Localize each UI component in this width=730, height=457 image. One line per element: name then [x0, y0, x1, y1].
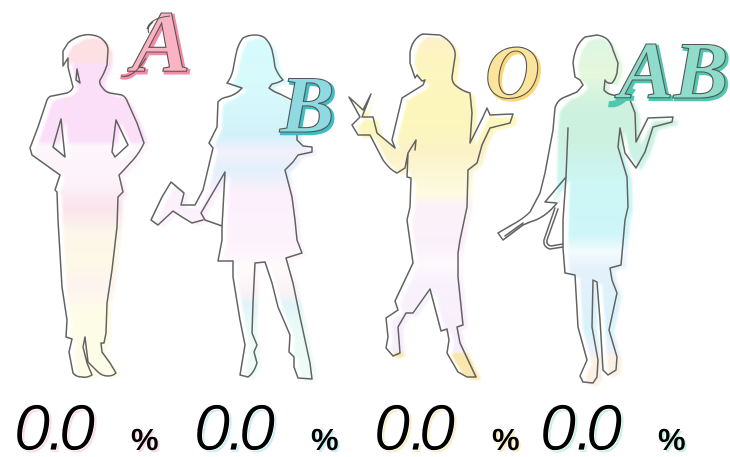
silhouette: woman A colored fill [35, 38, 149, 380]
panel: blood type O figure [349, 34, 518, 380]
panel: blood type AB figure [498, 35, 678, 386]
stat: type B percentage [194, 391, 341, 457]
silhouette: woman O colored fill [354, 37, 518, 380]
letter: blood type B: B [281, 61, 337, 152]
stat: type AB percentage: % [658, 422, 686, 457]
letter: blood type B: B [279, 59, 335, 150]
stat: type AB percentage [540, 391, 688, 457]
stat: type A percentage: % [131, 422, 159, 457]
stat: type B percentage: % [311, 422, 339, 457]
silhouette: woman AB colored fill [552, 38, 678, 386]
silhouette: woman B outline [151, 35, 312, 379]
stat: type A percentage [14, 391, 161, 457]
letter: blood type O: O [487, 33, 542, 117]
letter: blood type AB: AB [616, 27, 730, 118]
silhouette: woman O outline [349, 34, 513, 377]
silhouette: woman B colored fill [156, 38, 317, 382]
stat: type O percentage: % [492, 422, 520, 457]
letter: blood type O: O [485, 31, 540, 115]
silhouette: woman AB outline [498, 35, 673, 383]
stat: type O percentage [374, 391, 522, 457]
letter: blood type AB: AB [614, 25, 728, 116]
panel: blood type B figure [151, 35, 317, 382]
panel: blood type A figure [30, 35, 149, 380]
silhouette: woman A outline [30, 35, 144, 377]
icon: bag strap [544, 208, 563, 249]
